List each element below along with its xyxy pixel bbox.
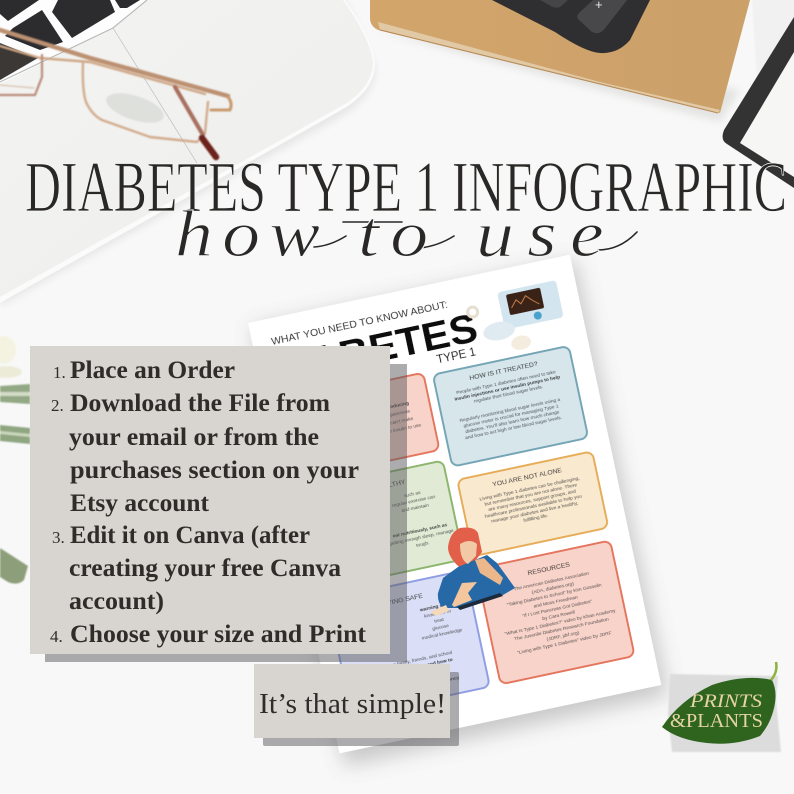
subtitle: how to use: use <box>476 198 604 271</box>
panel: what is it: enough insulin to use <box>375 422 422 438</box>
panel: staying healthy: getting enough sleep, manage <box>389 528 454 547</box>
step 2: 2. <box>51 396 64 415</box>
panel: staying safe: treat <box>434 617 445 625</box>
logo wordmark <box>670 691 763 732</box>
step 3: account) <box>69 588 164 615</box>
panel: how is it treated: insulin injections or use insulin pumps to help <box>454 374 561 403</box>
shadow: steps box <box>45 364 407 662</box>
subtitle: how to use: how <box>175 198 320 271</box>
step 2: your email or from the <box>69 424 319 451</box>
logo: prints and plants leaf <box>662 662 781 752</box>
photo: plant leaves <box>0 336 30 584</box>
panel: how is it treated: diabetes. You'll also learn how much change <box>465 409 560 435</box>
illustration: woman using a device <box>430 528 515 616</box>
panel: resources: by Cara Rowell <box>542 609 576 622</box>
step 4: Choose your size and Print <box>70 621 367 648</box>
panel: what is it: insulin-producing <box>368 400 409 415</box>
photo: glasses <box>0 30 231 157</box>
panel: staying safe: emergency <box>433 675 460 686</box>
panel: staying safe: Inform your family, friends, and school <box>371 650 453 673</box>
photo: black clipboard <box>723 0 794 188</box>
step 2 <box>51 390 359 517</box>
panel: how is it treated: and how to act high or low blood sugar levels. <box>465 415 563 441</box>
step 2: purchases section on your <box>70 457 359 484</box>
panel: staying safe: medical knowledge <box>421 627 463 642</box>
panel: you are not alone: Living with Type 1 diabetes can be challenging, <box>479 476 580 503</box>
panel: resources: "Living with Type 1 Diabetes" video by JDRF <box>517 630 612 656</box>
sheet header: TYPE 1 <box>436 346 477 366</box>
panel: staying healthy: such as <box>403 490 422 499</box>
step 3: 3. <box>52 528 65 547</box>
panel: how is it treated <box>433 346 588 467</box>
sheet header: WHAT YOU NEED TO KNOW ABOUT: <box>270 300 449 348</box>
sheet header: DIABETES <box>264 306 482 393</box>
panel: what is it: pancreas <box>390 408 411 418</box>
panel: how is it treated: HOW IS IT TREATED? <box>469 361 539 382</box>
panel: staying safe: warning signs <box>418 601 453 614</box>
panel: you are not alone: healthcare professionals available to help you <box>484 493 583 520</box>
panel: you are not alone <box>457 451 608 556</box>
panel: what is it: can't make <box>390 416 414 427</box>
panel: what is it <box>285 373 440 479</box>
panel: resources: RESOURCES <box>527 561 571 577</box>
panel: you are not alone: manage your diabetes and live a healthy, <box>491 500 579 525</box>
panel: resources: (JDRF, jdrf.org) <box>546 630 580 643</box>
panel: staying healthy: regular exercise can <box>392 494 436 509</box>
panel: staying healthy: eat nutritiously, such as <box>392 522 448 540</box>
panel: staying healthy: and maintain <box>401 502 430 514</box>
callout: it's that simple <box>254 664 450 738</box>
photo: tan notebook <box>370 0 750 122</box>
panel: resources: (ADA, diabetes.org) <box>531 581 575 596</box>
panel: how is it treated: glucose meter is crucial for managing Type 1 <box>463 403 559 429</box>
panel: resources <box>476 540 635 684</box>
panel: resources: "What Is Type 1 Diabetes?" video by Khan Academy <box>504 608 617 637</box>
panel: you are not alone: but remember that you are not alone. There <box>484 482 578 508</box>
step 3 <box>52 522 342 615</box>
step 1: 1. <box>53 363 66 382</box>
photo: calculator <box>492 0 650 53</box>
subtitle: how to use <box>175 198 637 271</box>
panel: steps box <box>30 346 390 654</box>
shadow: simple box <box>263 672 459 746</box>
step 1: Place an Order <box>70 357 235 384</box>
panel: resources: The Juvenile Diabetes Research Foundation <box>514 616 610 642</box>
panel: staying safe: know how to <box>424 608 452 620</box>
panel: staying safe: STAYING SAFE <box>375 593 424 610</box>
logo wordmark: &PLANTS <box>670 710 763 732</box>
panel: what is it: WHAT IS IT? <box>337 393 377 408</box>
step 2: Download the File from <box>70 390 330 417</box>
step 3: Edit it on Canva (after <box>70 522 310 549</box>
panel: staying healthy: STAYING HEALTHY <box>344 479 407 498</box>
sheet paper <box>248 255 661 753</box>
panel: staying healthy <box>304 460 464 589</box>
panel: staying safe <box>327 570 490 716</box>
step 3: creating your free Canva <box>69 555 342 582</box>
panel: resources: "Taking Diabetes to School" by Kim Gosselin <box>506 582 602 608</box>
panel: you are not alone: YOU ARE NOT ALONE <box>492 467 563 489</box>
panel: you are not alone: are many resources, support groups, and <box>488 489 577 513</box>
panel: resources: and Moss Freedman <box>533 594 579 610</box>
panel: you are not alone: fulfilling life. <box>523 513 549 524</box>
panel: staying healthy: tough. <box>416 540 430 549</box>
step 2: Etsy account <box>70 490 210 517</box>
subtitle: how to use: to <box>358 198 428 271</box>
panel: resources: The American Diabetes Association <box>513 571 590 593</box>
panel: staying safe: glucose <box>432 623 450 632</box>
paper shadow <box>252 260 668 766</box>
infographic sheet preview <box>248 255 661 753</box>
panel: how is it treated: People with Type 1 diabetes often need to take <box>456 369 557 396</box>
callout: it's that simple: It’s that simple! <box>259 688 446 720</box>
logo wordmark: PRINTS <box>689 691 763 712</box>
step 4: 4. <box>50 627 63 646</box>
panel: resources: "If I Lost Pancreas Got Diabetes" <box>522 599 593 619</box>
panel: how is it treated: regulate their blood sugar levels. <box>473 384 544 405</box>
icon: glucose monitor <box>465 280 568 359</box>
panel: staying safe: aware of your diabetes and how to <box>374 657 453 679</box>
photo: laptop <box>0 0 375 306</box>
panel: staying safe: help <box>410 671 420 679</box>
panel: how is it treated: Regularly monitoring blood sugar levels using a <box>459 397 561 424</box>
